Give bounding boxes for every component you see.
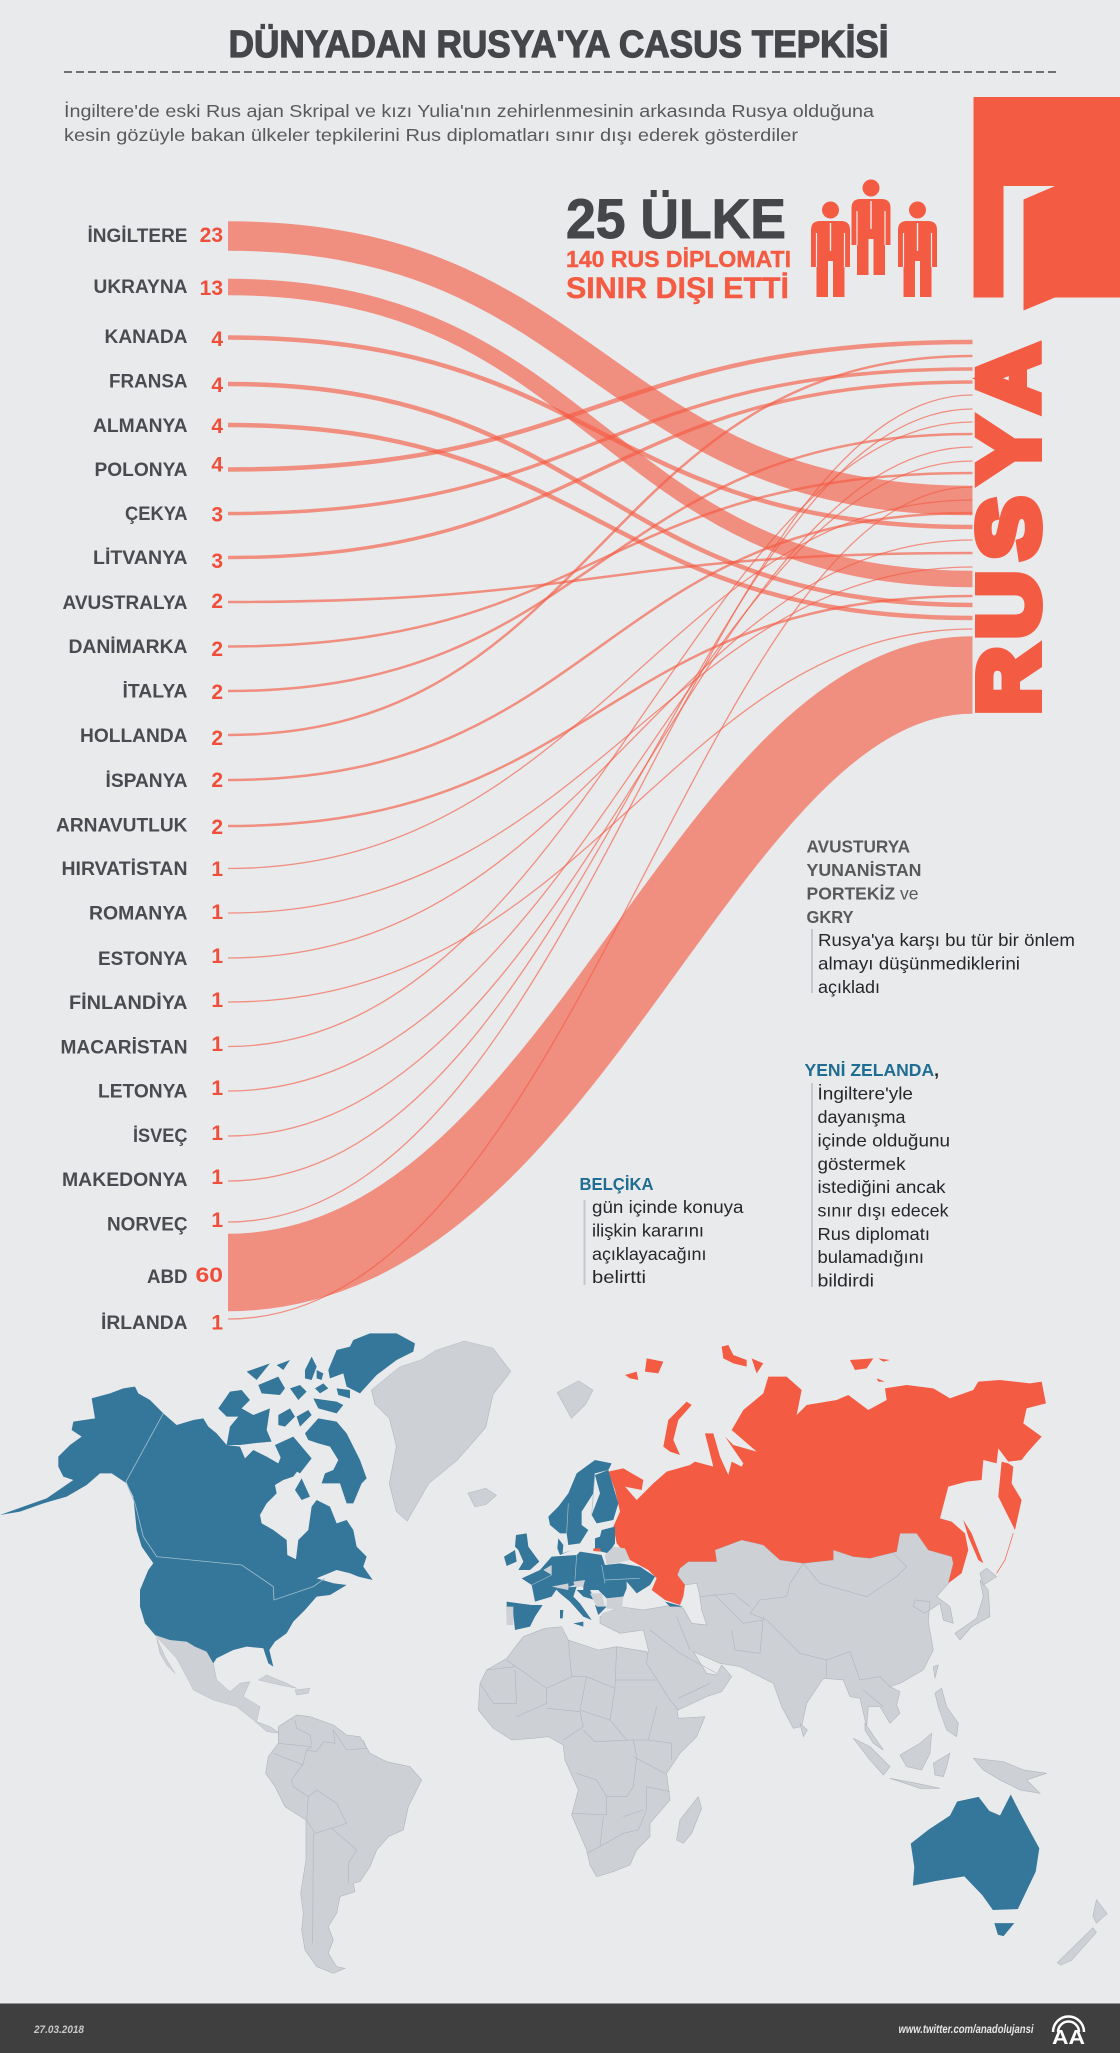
row: Kanada 4 <box>104 327 223 351</box>
row: Litvanya 3: LİTVANYA <box>93 548 188 569</box>
logo: Anadolu Agency <box>1052 2016 1085 2049</box>
map: Asia and Middle East <box>600 1533 1047 1793</box>
note: Avusturya, Yunanistan, Portekiz, GKRY: PORTEKİZ ve <box>806 884 918 904</box>
note: Yeni Zelanda: içinde olduğunu <box>818 1130 950 1150</box>
map: Australia <box>911 1795 1039 1936</box>
footer bar <box>0 2004 1120 2053</box>
row: İsveç 1 <box>133 1122 223 1147</box>
country labels <box>56 224 223 1334</box>
flow: Estonya <box>228 540 972 958</box>
flow: Litvanya <box>228 382 972 558</box>
row: İrlanda 1: 1 <box>211 1312 223 1334</box>
note: Avusturya, Yunanistan, Portekiz, GKRY: AVUSTURYA <box>806 836 910 856</box>
world map <box>0 1333 1107 1973</box>
row: Kanada 4: 4 <box>211 328 223 351</box>
row: Finlandiya 1: FİNLANDİYA <box>69 993 188 1014</box>
flow: İtalya <box>228 434 972 691</box>
row: Letonya 1: 1 <box>211 1077 223 1100</box>
row: Hırvatistan 1 <box>62 858 223 881</box>
note: Avusturya, Yunanistan, Portekiz, GKRY <box>806 836 1075 997</box>
row: Litvanya 3 <box>93 548 223 573</box>
row: Fransa 4: FRANSA <box>109 372 188 392</box>
row: Makedonya 1 <box>62 1166 223 1191</box>
intro text <box>64 101 874 145</box>
row: Macaristan 1: MACARİSTAN <box>60 1038 188 1058</box>
note: Yeni Zelanda <box>804 1060 950 1290</box>
row: Arnavutluk 2: 2 <box>211 816 223 839</box>
map: South America and Africa <box>266 1627 705 1973</box>
row: İrlanda 1: İRLANDA <box>101 1313 188 1334</box>
flow: İngiltere <box>228 236 972 500</box>
row: Arnavutluk 2: ARNAVUTLUK <box>56 816 188 836</box>
RUSYA vertical word: RUSYA <box>961 345 1056 714</box>
note: Yeni Zelanda: göstermek <box>818 1154 906 1174</box>
logo: Anadolu Agency: AA <box>1052 2027 1085 2049</box>
row: Danimarka 2: 2 <box>211 638 223 661</box>
row: Danimarka 2 <box>68 637 223 661</box>
flow: Avustralya <box>228 553 972 602</box>
row: İngiltere 23: 23 <box>200 224 223 247</box>
row: İspanya 2: 2 <box>211 769 223 792</box>
map: Greenland, Iceland, Svalbard, Oceania outline <box>371 1341 1107 1965</box>
note: Yeni Zelanda: Rus diplomatı <box>818 1224 930 1244</box>
flow: Kanada <box>228 338 972 527</box>
flow: Romanya <box>228 567 972 913</box>
row: Estonya 1: ESTONYA <box>98 949 188 970</box>
row: İngiltere 23: İNGİLTERE <box>88 226 188 247</box>
flow: Çekya <box>228 369 972 514</box>
headline stat: 25 ÜLKE <box>566 187 786 250</box>
row: Finlandiya 1 <box>69 989 223 1014</box>
row: İsveç 1: 1 <box>211 1122 223 1145</box>
row: Polonya 4: POLONYA <box>94 460 188 481</box>
note: Avusturya, Yunanistan, Portekiz, GKRY: YUNANİSTAN <box>806 860 922 880</box>
row: Romanya 1 <box>89 901 223 924</box>
row: Çekya 3: 3 <box>211 504 223 526</box>
flow: Makedonya <box>228 409 972 1181</box>
flow: Letonya <box>228 461 972 1091</box>
row: Hırvatistan 1: 1 <box>211 858 223 881</box>
flow: Finlandiya <box>228 629 972 1002</box>
row: Avustralya 2: 2 <box>211 590 223 613</box>
row: Estonya 1 <box>98 945 223 970</box>
flow: ABD <box>228 675 972 1272</box>
flow: Hollanda <box>228 356 972 735</box>
row: Hırvatistan 1: HIRVATİSTAN <box>62 859 188 880</box>
icon: open door <box>974 97 1120 310</box>
row: ABD 60: ABD <box>147 1267 188 1288</box>
flow: İrlanda <box>228 487 972 1319</box>
row: İngiltere 23 <box>88 224 223 247</box>
row: Çekya 3: ÇEKYA <box>125 504 188 525</box>
row: İtalya 2: İTALYA <box>122 682 188 702</box>
map: Mexico and Central America <box>155 1635 310 1733</box>
intro text: kesin gözüyle bakan ülkeler tepkilerini Rus diplomatları sınır dışı ederek gösterdiler <box>64 125 798 145</box>
note: Yeni Zelanda: sınır dışı edecek <box>818 1200 949 1220</box>
flow: Arnavutluk <box>228 596 972 826</box>
row: Polonya 4: 4 <box>211 454 223 476</box>
date: 27.03.2018 <box>33 2024 85 2036</box>
row: İspanya 2: İSPANYA <box>106 771 188 792</box>
flow: Fransa <box>228 384 972 605</box>
note: Yeni Zelanda: istediğini ancak <box>818 1177 946 1197</box>
row: Fransa 4 <box>109 372 223 397</box>
flow: Hırvatistan <box>228 500 972 868</box>
title: DÜNYADAN RUSYA'YA CASUS TEPKİSİ <box>229 23 889 66</box>
note: Belçika: ilişkin kararını <box>592 1220 704 1240</box>
row: İsveç 1: İSVEÇ <box>133 1126 188 1147</box>
row: Almanya 4: 4 <box>211 415 223 438</box>
flow: Danimarka <box>228 473 972 646</box>
note: Belçika: açıklayacağını <box>592 1244 706 1264</box>
headline stat: SINIR DIŞI ETTİ <box>566 272 789 305</box>
row: Almanya 4 <box>93 415 223 438</box>
flow: Almanya <box>228 425 972 618</box>
intro text: İngiltere'de eski Rus ajan Skripal ve kızı Yulia'nın zehirlenmesinin arkasında Rusya olduğuna <box>64 101 874 121</box>
row: Polonya 4 <box>94 454 223 481</box>
note: Yeni Zelanda: dayanışma <box>818 1107 906 1127</box>
row: ABD 60: 60 <box>196 1264 223 1287</box>
row: Avustralya 2 <box>62 590 223 614</box>
row: Ukrayna 13: UKRAYNA <box>94 277 188 298</box>
note: Avusturya, Yunanistan, Portekiz, GKRY: almayı düşünmediklerini <box>818 954 1020 974</box>
flow: Macaristan <box>228 422 972 1046</box>
headline stat <box>566 187 791 305</box>
sankey flows <box>228 236 972 1319</box>
row: Hollanda 2: HOLLANDA <box>80 726 188 747</box>
note: Yeni Zelanda: bulamadığını <box>818 1247 924 1267</box>
note: Avusturya, Yunanistan, Portekiz, GKRY: GKRY <box>806 907 854 927</box>
row: İrlanda 1 <box>101 1312 223 1334</box>
map: Europe <box>504 1460 683 1630</box>
row: Ukrayna 13 <box>94 277 223 300</box>
row: Makedonya 1: MAKEDONYA <box>62 1170 188 1191</box>
note: Belçika: gün içinde konuya <box>592 1197 744 1217</box>
row: Almanya 4: ALMANYA <box>93 416 188 437</box>
row: Arnavutluk 2 <box>56 816 223 839</box>
row: Danimarka 2: DANİMARKA <box>68 637 188 658</box>
row: Hollanda 2 <box>80 726 223 750</box>
note: Avusturya, Yunanistan, Portekiz, GKRY: açıkladı <box>818 977 880 997</box>
flow: Polonya <box>228 342 972 470</box>
row: Norveç 1 <box>107 1209 223 1236</box>
note: Yeni Zelanda: YENİ ZELANDA, <box>804 1060 939 1080</box>
row: İtalya 2 <box>122 681 223 704</box>
row: Norveç 1: NORVEÇ <box>107 1214 188 1236</box>
row: Litvanya 3: 3 <box>211 550 223 573</box>
map: North America in blue <box>0 1333 415 1667</box>
note: Yeni Zelanda: İngiltere'yle <box>818 1084 913 1104</box>
flow: Ukrayna <box>228 287 972 579</box>
row: Ukrayna 13: 13 <box>200 277 223 300</box>
note: Avusturya, Yunanistan, Portekiz, GKRY: Rusya'ya karşı bu tür bir önlem <box>818 930 1075 950</box>
icon: three diplomats <box>811 180 937 297</box>
row: Kanada 4: KANADA <box>104 327 188 348</box>
row: Fransa 4: 4 <box>211 374 223 397</box>
row: ABD 60 <box>147 1264 223 1288</box>
row: Romanya 1: ROMANYA <box>89 904 188 924</box>
row: Macaristan 1: 1 <box>211 1033 223 1056</box>
row: İtalya 2: 2 <box>211 681 223 704</box>
row: Estonya 1: 1 <box>211 945 223 968</box>
map: Russia <box>608 1345 1046 1605</box>
row: Romanya 1: 1 <box>211 901 223 924</box>
row: Hollanda 2: 2 <box>211 727 223 750</box>
note: Belçika: belirtti <box>592 1267 646 1287</box>
flow: Norveç <box>228 395 972 1222</box>
row: İspanya 2 <box>106 769 223 792</box>
headline stat: 140 RUS DİPLOMATI <box>566 246 791 272</box>
row: Makedonya 1: 1 <box>211 1166 223 1189</box>
row: Macaristan 1 <box>60 1033 223 1058</box>
row: Avustralya 2: AVUSTRALYA <box>62 593 188 614</box>
row: Letonya 1: LETONYA <box>98 1082 188 1102</box>
note: Belçika: BELÇİKA <box>580 1174 654 1194</box>
note: Belçika <box>580 1174 744 1287</box>
flow: İsveç <box>228 447 972 1136</box>
row: Çekya 3 <box>125 504 223 526</box>
row: Norveç 1: 1 <box>211 1209 223 1232</box>
source url: www.twitter.com/anadolujansi <box>898 2024 1034 2036</box>
note: Yeni Zelanda: bildirdi <box>818 1270 874 1290</box>
flow: İspanya <box>228 513 972 780</box>
row: Letonya 1 <box>98 1077 223 1102</box>
row: Finlandiya 1: 1 <box>211 989 223 1012</box>
